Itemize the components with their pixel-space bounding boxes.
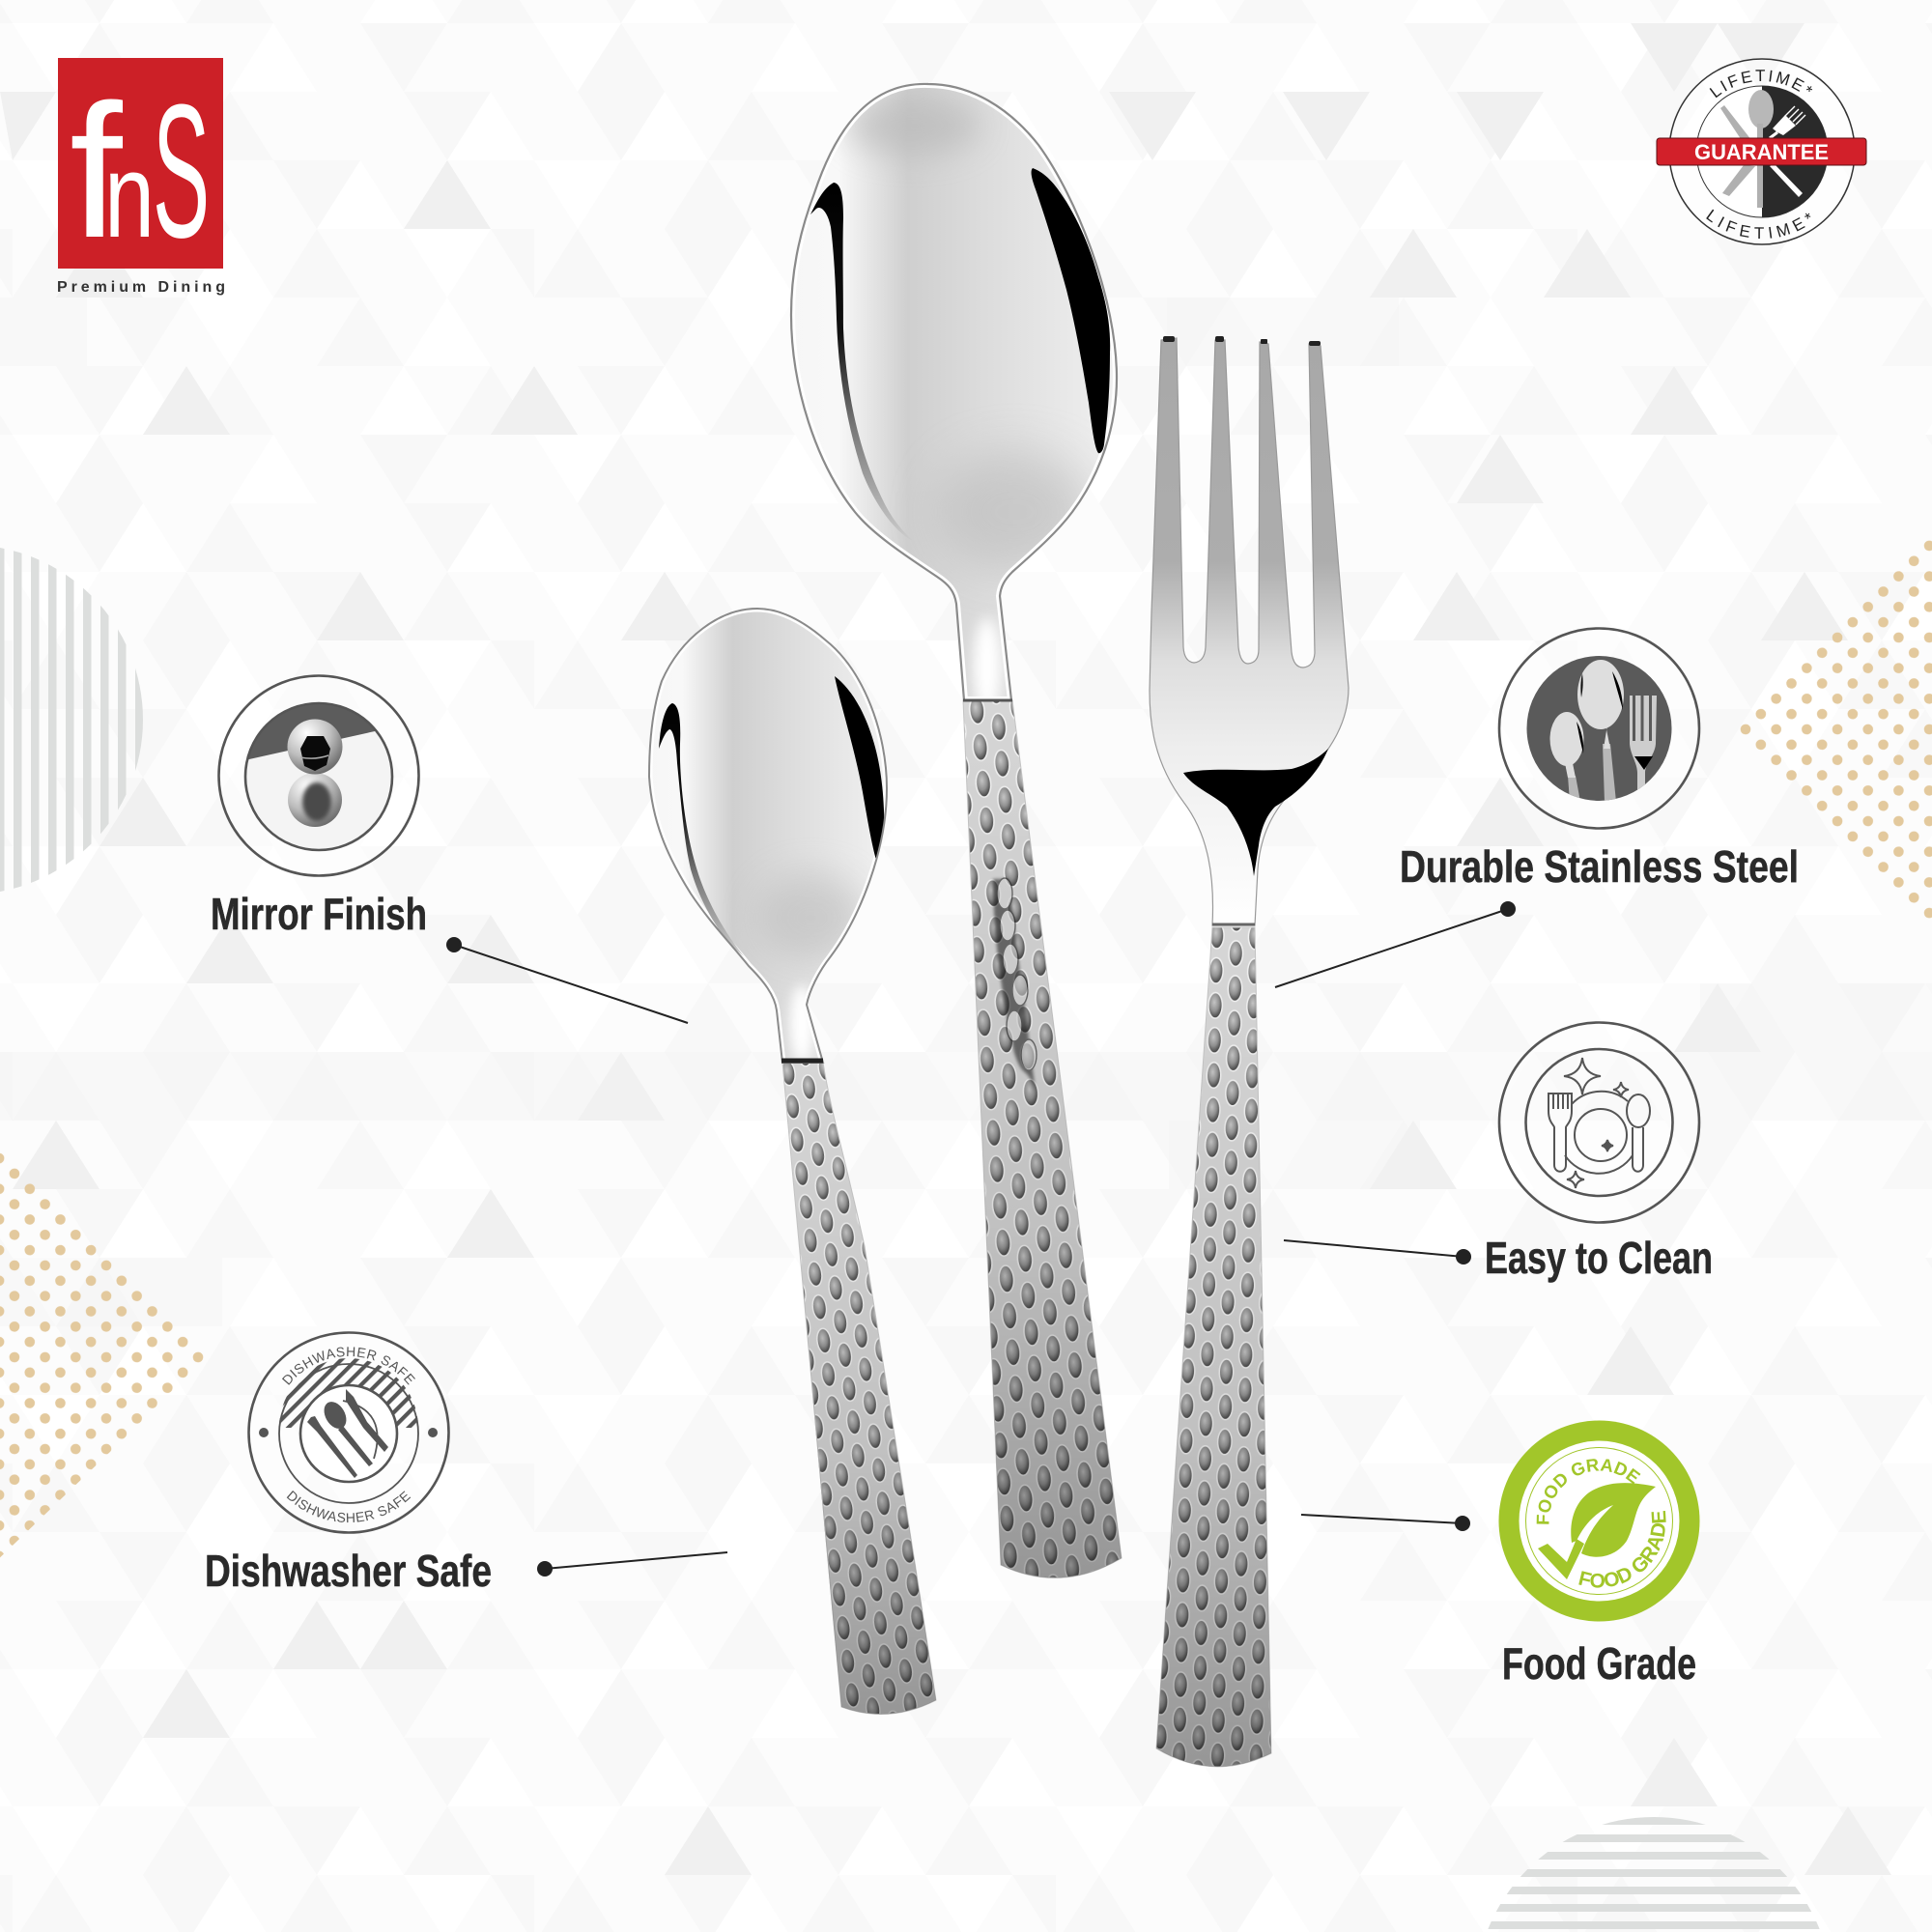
logo: FnS Premium Dining: n [104, 130, 155, 263]
badge: lifetime guarantee [1656, 58, 1866, 245]
icon: cutlery in circle [1499, 628, 1699, 829]
decoration: striped half circle left [0, 531, 143, 908]
callout line: mirror finish [446, 937, 688, 1023]
badge: lifetime guarantee: GUARANTEE [1694, 140, 1829, 164]
cutlery: large spoon [782, 77, 1130, 1577]
large spoon rim [791, 84, 1117, 700]
fork head [1150, 338, 1349, 925]
icon: clean plate [1499, 1022, 1699, 1223]
small spoon handle [782, 1063, 936, 1715]
badge: lifetime guarantee: LIFETIME* [1706, 209, 1810, 239]
decoration: striped half circle bottom [1488, 1817, 1820, 1929]
cutlery: fork [1150, 336, 1349, 1767]
logo: FnS Premium Dining: f [70, 65, 124, 277]
feature: durable stainless steel [1400, 628, 1799, 892]
feature: mirror finish [211, 676, 427, 939]
decoration: dotted diamond left [0, 1141, 209, 1565]
callout line: food grade [1301, 1515, 1470, 1531]
icon: dishwasher seal: DISHWASHER SAFE [282, 1347, 415, 1385]
icon: food grade seal: FOOD GRADE [1536, 1459, 1640, 1524]
icon: food grade seal [1499, 1420, 1700, 1621]
label: easy to clean: Easy to Clean [1485, 1233, 1713, 1283]
feature: easy to clean [1485, 1022, 1713, 1283]
icon: food grade seal: FOOD GRADE [1578, 1511, 1666, 1588]
label: dishwasher safe: Dishwasher Safe [205, 1546, 492, 1596]
large spoon handle [963, 700, 1122, 1577]
large spoon bowl [810, 88, 1113, 696]
icon: mirror ball [218, 676, 419, 875]
icon: dishwasher seal: DISHWASHER SAFE [286, 1491, 412, 1522]
fork handle [1156, 927, 1271, 1767]
logo: FnS Premium Dining [57, 58, 225, 296]
label: mirror finish: Mirror Finish [211, 889, 427, 939]
callout line: easy to clean [1284, 1240, 1471, 1264]
callout line: durable stainless steel [1275, 901, 1516, 987]
fork shadow reflection [1183, 749, 1328, 876]
cutlery: small spoon [642, 604, 936, 1715]
fork tine tips [1163, 336, 1321, 346]
icon: dishwasher seal [247, 1331, 450, 1534]
small spoon rim [649, 609, 887, 1063]
logo: FnS Premium Dining: S [153, 66, 210, 278]
badge: lifetime guarantee: LIFETIME* [1710, 70, 1812, 99]
feature: food grade [1499, 1420, 1700, 1689]
label: durable stainless steel: Durable Stainless Steel [1400, 841, 1799, 892]
feature: dishwasher safe [205, 1331, 492, 1596]
decoration: dotted diamond right [1735, 518, 1932, 942]
logo: FnS Premium Dining: Premium Dining [57, 279, 225, 296]
label: food grade: Food Grade [1502, 1638, 1696, 1689]
callout line: dishwasher safe [537, 1552, 727, 1577]
handle dark streak [993, 878, 1037, 1092]
small spoon bowl [655, 612, 885, 1059]
